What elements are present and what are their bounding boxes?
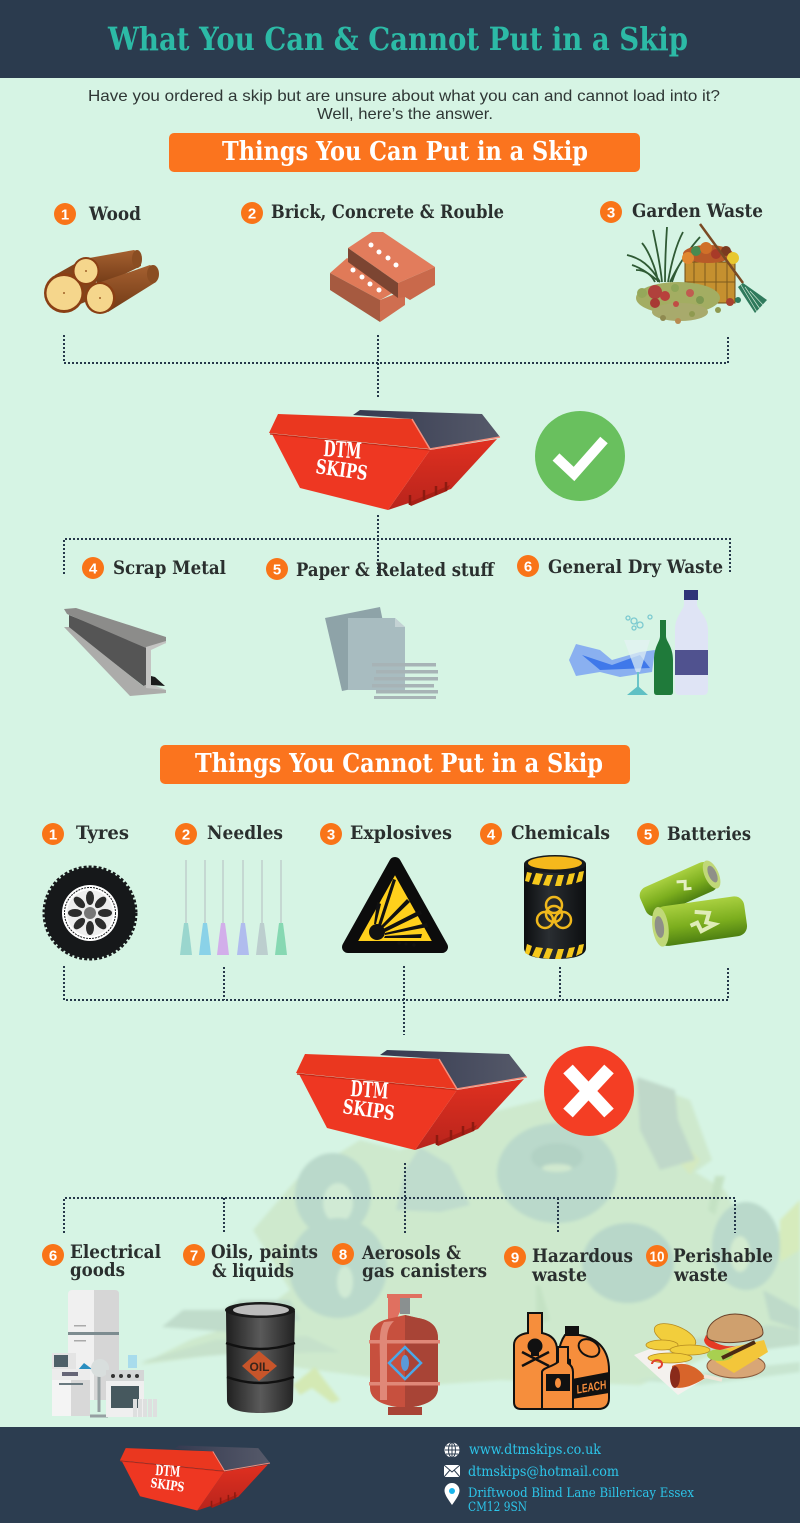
item 1: tyres: Tyres [76,823,129,844]
item 4: chemicals [480,823,610,845]
skip with DTM logo (can): SKIPS [314,454,369,485]
icon: batteries [637,857,748,948]
heading: things you cannot put in a skip [160,745,630,784]
item 4: scrap metal [82,557,226,579]
intro text: Have you ordered a skip but are unsure about what you can and cannot load into it? [88,88,720,105]
item 3: explosives: 3 [327,826,335,844]
icon: needles [180,860,287,955]
connectors: skip to hazardous group [64,1163,735,1233]
item 2: brick: Brick, Concrete & Rouble [271,202,504,223]
background: ghosted waste pile [140,1077,800,1403]
icon: bricks [330,232,435,322]
item 5: batteries [637,823,751,845]
footer skip logo [120,1446,270,1510]
item 2: brick: 2 [248,206,256,222]
icon: oil drum [225,1302,295,1413]
connectors: top group to skip [64,335,728,398]
contact: email: dtmskips@hotmail.com [468,1464,619,1480]
item 3: garden waste: 3 [607,204,615,222]
skip with DTM logo (can): DTM [323,436,362,465]
item 6: electrical goods [42,1242,161,1281]
item 9: hazardous waste [504,1246,633,1286]
icon: oil drum: OIL [250,1360,270,1374]
item 6: general dry waste: 6 [524,558,532,576]
heading: things you can put in a skip: Things You Can Put in a Skip [222,137,588,167]
item 2: needles [175,823,283,845]
item 6: electrical goods: 6 [49,1248,57,1264]
icon: gas cylinder [369,1294,440,1415]
skip with DTM logo (cannot) [296,1050,527,1150]
item 10: perishable waste: waste [673,1265,728,1286]
item 8: aerosols and gas canisters: 8 [339,1246,347,1264]
footer skip logo: DTM [155,1462,181,1481]
contact: address: Driftwood Blind Lane Billericay Essex [468,1486,695,1501]
intro text [88,88,720,123]
icon: garden waste [627,224,767,324]
skip with DTM logo (cannot): DTM [350,1076,389,1105]
item 5: paper: 5 [273,562,281,578]
item 9: hazardous waste: 9 [511,1250,519,1266]
item 4: scrap metal: Scrap Metal [113,558,226,579]
heading: things you can put in a skip [169,133,640,172]
item 5: batteries: Batteries [667,824,751,845]
icon: explosive warning sign [348,863,442,947]
item 10: perishable waste: 10 [650,1248,664,1266]
item 10: perishable waste: Perishable [673,1246,773,1267]
item 8: aerosols and gas canisters [332,1243,487,1282]
icon: biohazard barrel [524,855,586,959]
item 8: aerosols and gas canisters: gas canisters [362,1261,487,1282]
connectors: cannot group to skip [64,966,728,1035]
footer bar [0,1427,800,1523]
item 9: hazardous waste: Hazardous [532,1246,633,1267]
item 3: explosives: Explosives [350,823,452,844]
icon: green tick [535,411,625,501]
icon: electrical goods [52,1290,157,1417]
item 8: aerosols and gas canisters: Aerosols & [361,1243,461,1264]
heading: things you cannot put in a skip: Things You Cannot Put in a Skip [195,749,603,779]
icon: paper stack [325,607,438,699]
item 7: oils, paints and liquids: Oils, paints [211,1242,318,1263]
icon: wood logs [44,250,159,314]
item 7: oils, paints and liquids: 7 [190,1248,198,1264]
contact: address: CM12 9SN [468,1500,527,1515]
item 6: electrical goods: Electrical [70,1242,161,1263]
item 1: wood: 1 [61,206,69,224]
icon: hazardous bottles: LEACH [575,1378,608,1397]
icon: red cross [544,1046,634,1136]
title: What You Can & Cannot Put in a Skip [107,20,688,58]
item 4: scrap metal: 4 [89,560,98,578]
item 1: wood [54,203,141,225]
item 4: chemicals: Chemicals [511,823,610,844]
skip with DTM logo (cannot): SKIPS [341,1094,396,1125]
item 7: oils, paints and liquids: & liquids [212,1261,294,1282]
item 7: oils, paints and liquids [183,1242,318,1282]
item 1: tyres: 1 [49,826,57,844]
contact: website: www.dtmskips.co.uk [469,1442,601,1458]
icon: hazardous bottles [514,1313,609,1409]
intro text: Well, here’s the answer. [317,106,493,123]
skip with DTM logo (can) [269,410,500,510]
icon: bottles and plastic [569,590,708,695]
icon: tyre [44,867,136,959]
contact: address [444,1483,695,1515]
item 3: garden waste: Garden Waste [632,201,763,222]
header bar [0,0,800,78]
footer skip logo: SKIPS [149,1476,185,1496]
item 10: perishable waste [646,1245,773,1286]
item 2: needles: Needles [207,823,283,844]
item 5: batteries: 5 [644,826,652,844]
item 1: wood: Wood [88,204,141,225]
item 1: tyres [42,823,129,845]
item 5: paper: Paper & Related stuff [296,560,496,581]
connectors: skip to lower group [64,515,730,575]
item 6: general dry waste: General Dry Waste [548,557,723,578]
item 2: needles: 2 [182,826,190,844]
item 6: electrical goods: goods [70,1260,125,1281]
item 4: chemicals: 4 [487,826,496,844]
icon: food [634,1314,768,1395]
icon: steel beam [64,608,166,696]
item 9: hazardous waste: waste [531,1265,587,1286]
